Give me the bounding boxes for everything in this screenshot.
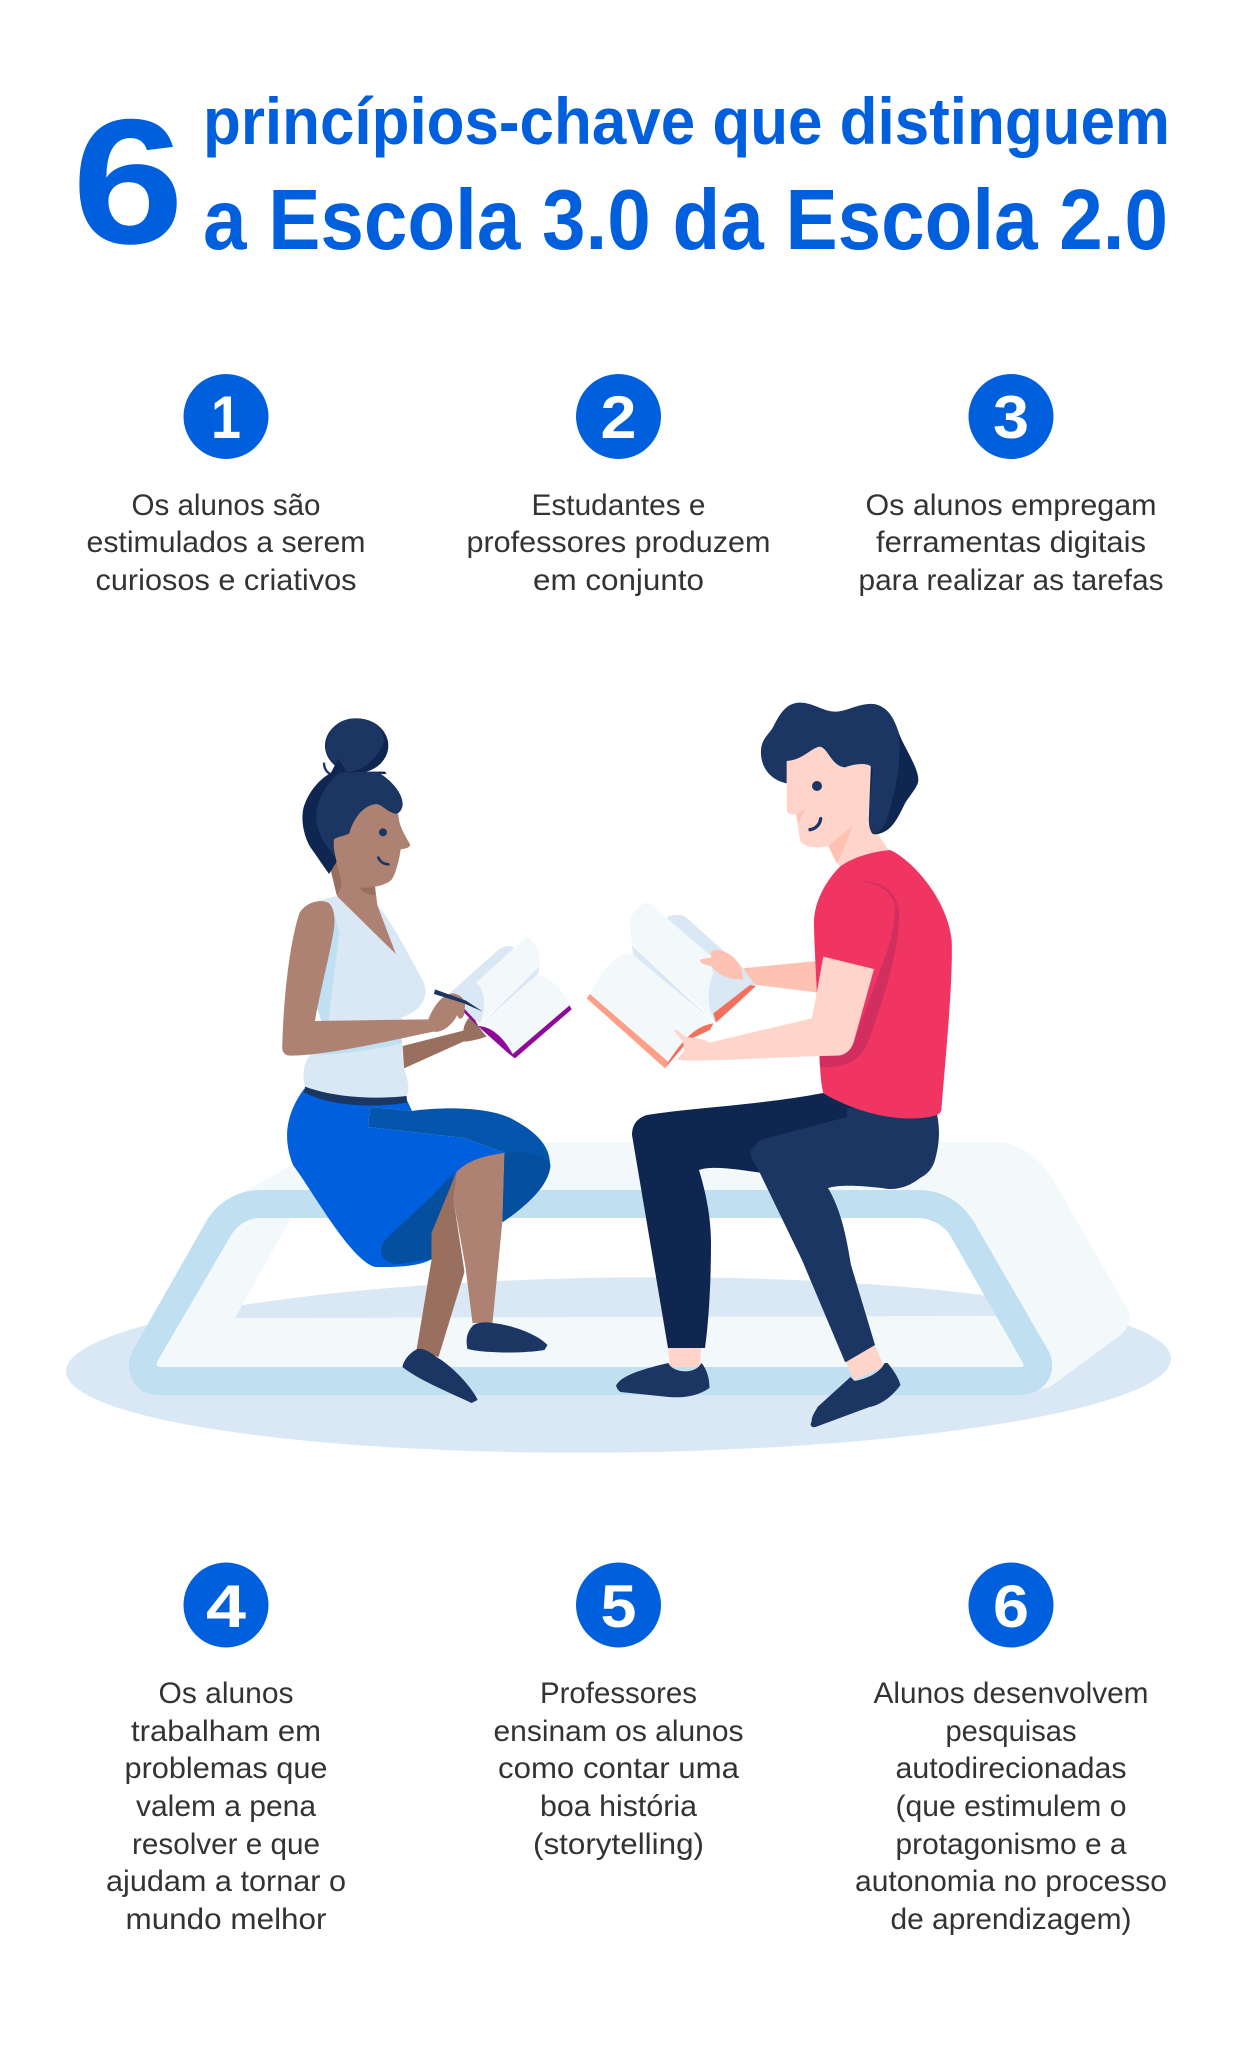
principle 4: valem a pena	[136, 1790, 316, 1823]
ankles	[668, 1345, 884, 1380]
title: princípios-chave que distinguem	[203, 84, 1170, 158]
principle 3: para realizar as tarefas	[858, 564, 1164, 597]
principle 5: 5	[600, 1573, 636, 1640]
principle 5: ensinam os alunos	[494, 1715, 744, 1748]
principle 6: protagonismo e a	[896, 1828, 1127, 1861]
woman	[282, 718, 572, 1403]
principle 6: pesquisas	[946, 1715, 1076, 1748]
hair	[761, 703, 918, 834]
principle 5: (storytelling)	[533, 1828, 704, 1861]
eye and smile	[810, 781, 822, 830]
principle 4: resolver e que	[132, 1828, 320, 1861]
neck shadow	[331, 857, 376, 895]
legs	[416, 1152, 550, 1357]
title: a Escola 3.0 da Escola 2.0	[203, 173, 1168, 268]
principle 1: 1	[211, 384, 241, 451]
title: 6	[72, 82, 184, 281]
face	[334, 804, 410, 888]
principle 4: trabalham em	[131, 1715, 321, 1748]
man	[587, 703, 952, 1427]
pen	[434, 989, 483, 1012]
principle 4: problemas que	[124, 1752, 328, 1785]
principle 6: Alunos desenvolvem	[874, 1677, 1148, 1710]
principle 1: estimulados a serem	[86, 526, 366, 559]
principle 1: curiosos e criativos	[96, 564, 356, 597]
hand and arm	[282, 901, 465, 1056]
hair	[302, 772, 403, 874]
principle 5: boa história	[540, 1790, 697, 1823]
principle 3: 3	[993, 384, 1029, 451]
principle 2: professores produzem	[466, 526, 770, 559]
floor ellipse	[65, 1271, 1172, 1459]
principle 5	[494, 1562, 744, 1861]
principle 1: Os alunos são	[132, 489, 320, 522]
principle 4: mundo melhor	[126, 1903, 327, 1936]
principle 4: 4	[206, 1573, 247, 1640]
principle 1	[86, 374, 366, 597]
title	[72, 82, 1170, 281]
arm behind	[700, 950, 818, 993]
principle 2: 2	[600, 384, 636, 451]
principle 5: Professores	[540, 1677, 697, 1710]
arm behind	[403, 1015, 487, 1068]
principle 6: autonomia no processo	[855, 1865, 1167, 1898]
skirt	[287, 1089, 550, 1267]
open book	[587, 902, 756, 1068]
neck	[331, 870, 397, 955]
arm and hand	[674, 957, 874, 1061]
shoes	[616, 1363, 900, 1427]
principle 5: como contar uma	[498, 1752, 739, 1785]
principle 3: ferramentas digitais	[876, 526, 1146, 559]
principle 6: de aprendizagem)	[890, 1903, 1132, 1936]
top	[303, 896, 425, 1099]
shoes	[402, 1322, 548, 1403]
principle 2: Estudantes e	[532, 489, 706, 522]
principle 4	[106, 1562, 346, 1936]
principle 3	[858, 374, 1164, 597]
principle 6: 6	[993, 1573, 1029, 1640]
shirt	[814, 850, 952, 1119]
principle 6: autodirecionadas	[896, 1752, 1126, 1785]
neck and face	[787, 747, 888, 867]
hair bun	[324, 718, 388, 774]
principle 3: Os alunos empregam	[866, 489, 1156, 522]
principle 6	[855, 1562, 1167, 1936]
principle 6: (que estimulem o	[896, 1790, 1126, 1823]
bench	[129, 1142, 1130, 1395]
waistband	[304, 1087, 407, 1105]
illustration: students reading on a bench	[65, 703, 1172, 1459]
principle 4: Os alunos	[158, 1677, 294, 1710]
open book	[449, 937, 572, 1058]
principle 4: ajudam a tornar o	[106, 1865, 346, 1898]
principle 2	[466, 374, 770, 597]
trousers	[632, 1093, 939, 1362]
principle 2: em conjunto	[533, 564, 704, 597]
